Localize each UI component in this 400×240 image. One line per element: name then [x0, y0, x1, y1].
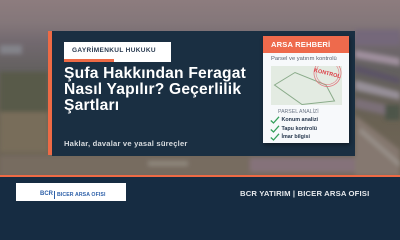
analysis caption: PARSEL ANALİZİ [278, 108, 319, 114]
icon: check [270, 116, 280, 124]
title: Nasıl Yapılır? Geçerlilik [64, 81, 241, 98]
item: tapu kontrolü [270, 125, 317, 133]
card header [263, 36, 349, 53]
checklist [270, 116, 318, 141]
map: parcel outline with stamp [271, 66, 342, 105]
footer band [0, 175, 400, 210]
icon: check [270, 125, 280, 133]
logo mark: BCR [40, 191, 53, 197]
title: Şufa Hakkından Feragat [64, 65, 246, 82]
footer brand text: BCR YATIRIM | BICER ARSA OFISI [240, 188, 369, 198]
panel: land guide card [263, 36, 349, 143]
title: Şartları [64, 97, 119, 114]
item: konum analizi: Konum analizi [282, 117, 318, 123]
label text: GAYRİMENKUL HUKUKU [72, 47, 156, 54]
card intro text: Parsel ve yatırım kontrolü [271, 56, 337, 62]
card heading: ARSA REHBERİ [271, 40, 330, 49]
category label [64, 42, 171, 62]
title [64, 65, 246, 114]
panel: title panel [52, 31, 355, 156]
logo name: BICER ARSA OFISI [57, 192, 105, 198]
label underline [64, 59, 114, 62]
background: aerial land photo [0, 0, 400, 175]
footer logo [16, 183, 126, 201]
item: tapu kontrolü: Tapu kontrolü [282, 126, 317, 132]
item: imar bilgisi [270, 133, 310, 141]
stamp: kontrol: KONTROL [313, 68, 342, 80]
item: konum analizi [270, 116, 318, 124]
icon: check [270, 133, 280, 141]
item: imar bilgisi: İmar bilgisi [282, 134, 310, 140]
accent bar [48, 31, 52, 155]
subtitle: Haklar, davalar ve yasal süreçler [64, 138, 188, 148]
logo divider [53, 191, 56, 199]
